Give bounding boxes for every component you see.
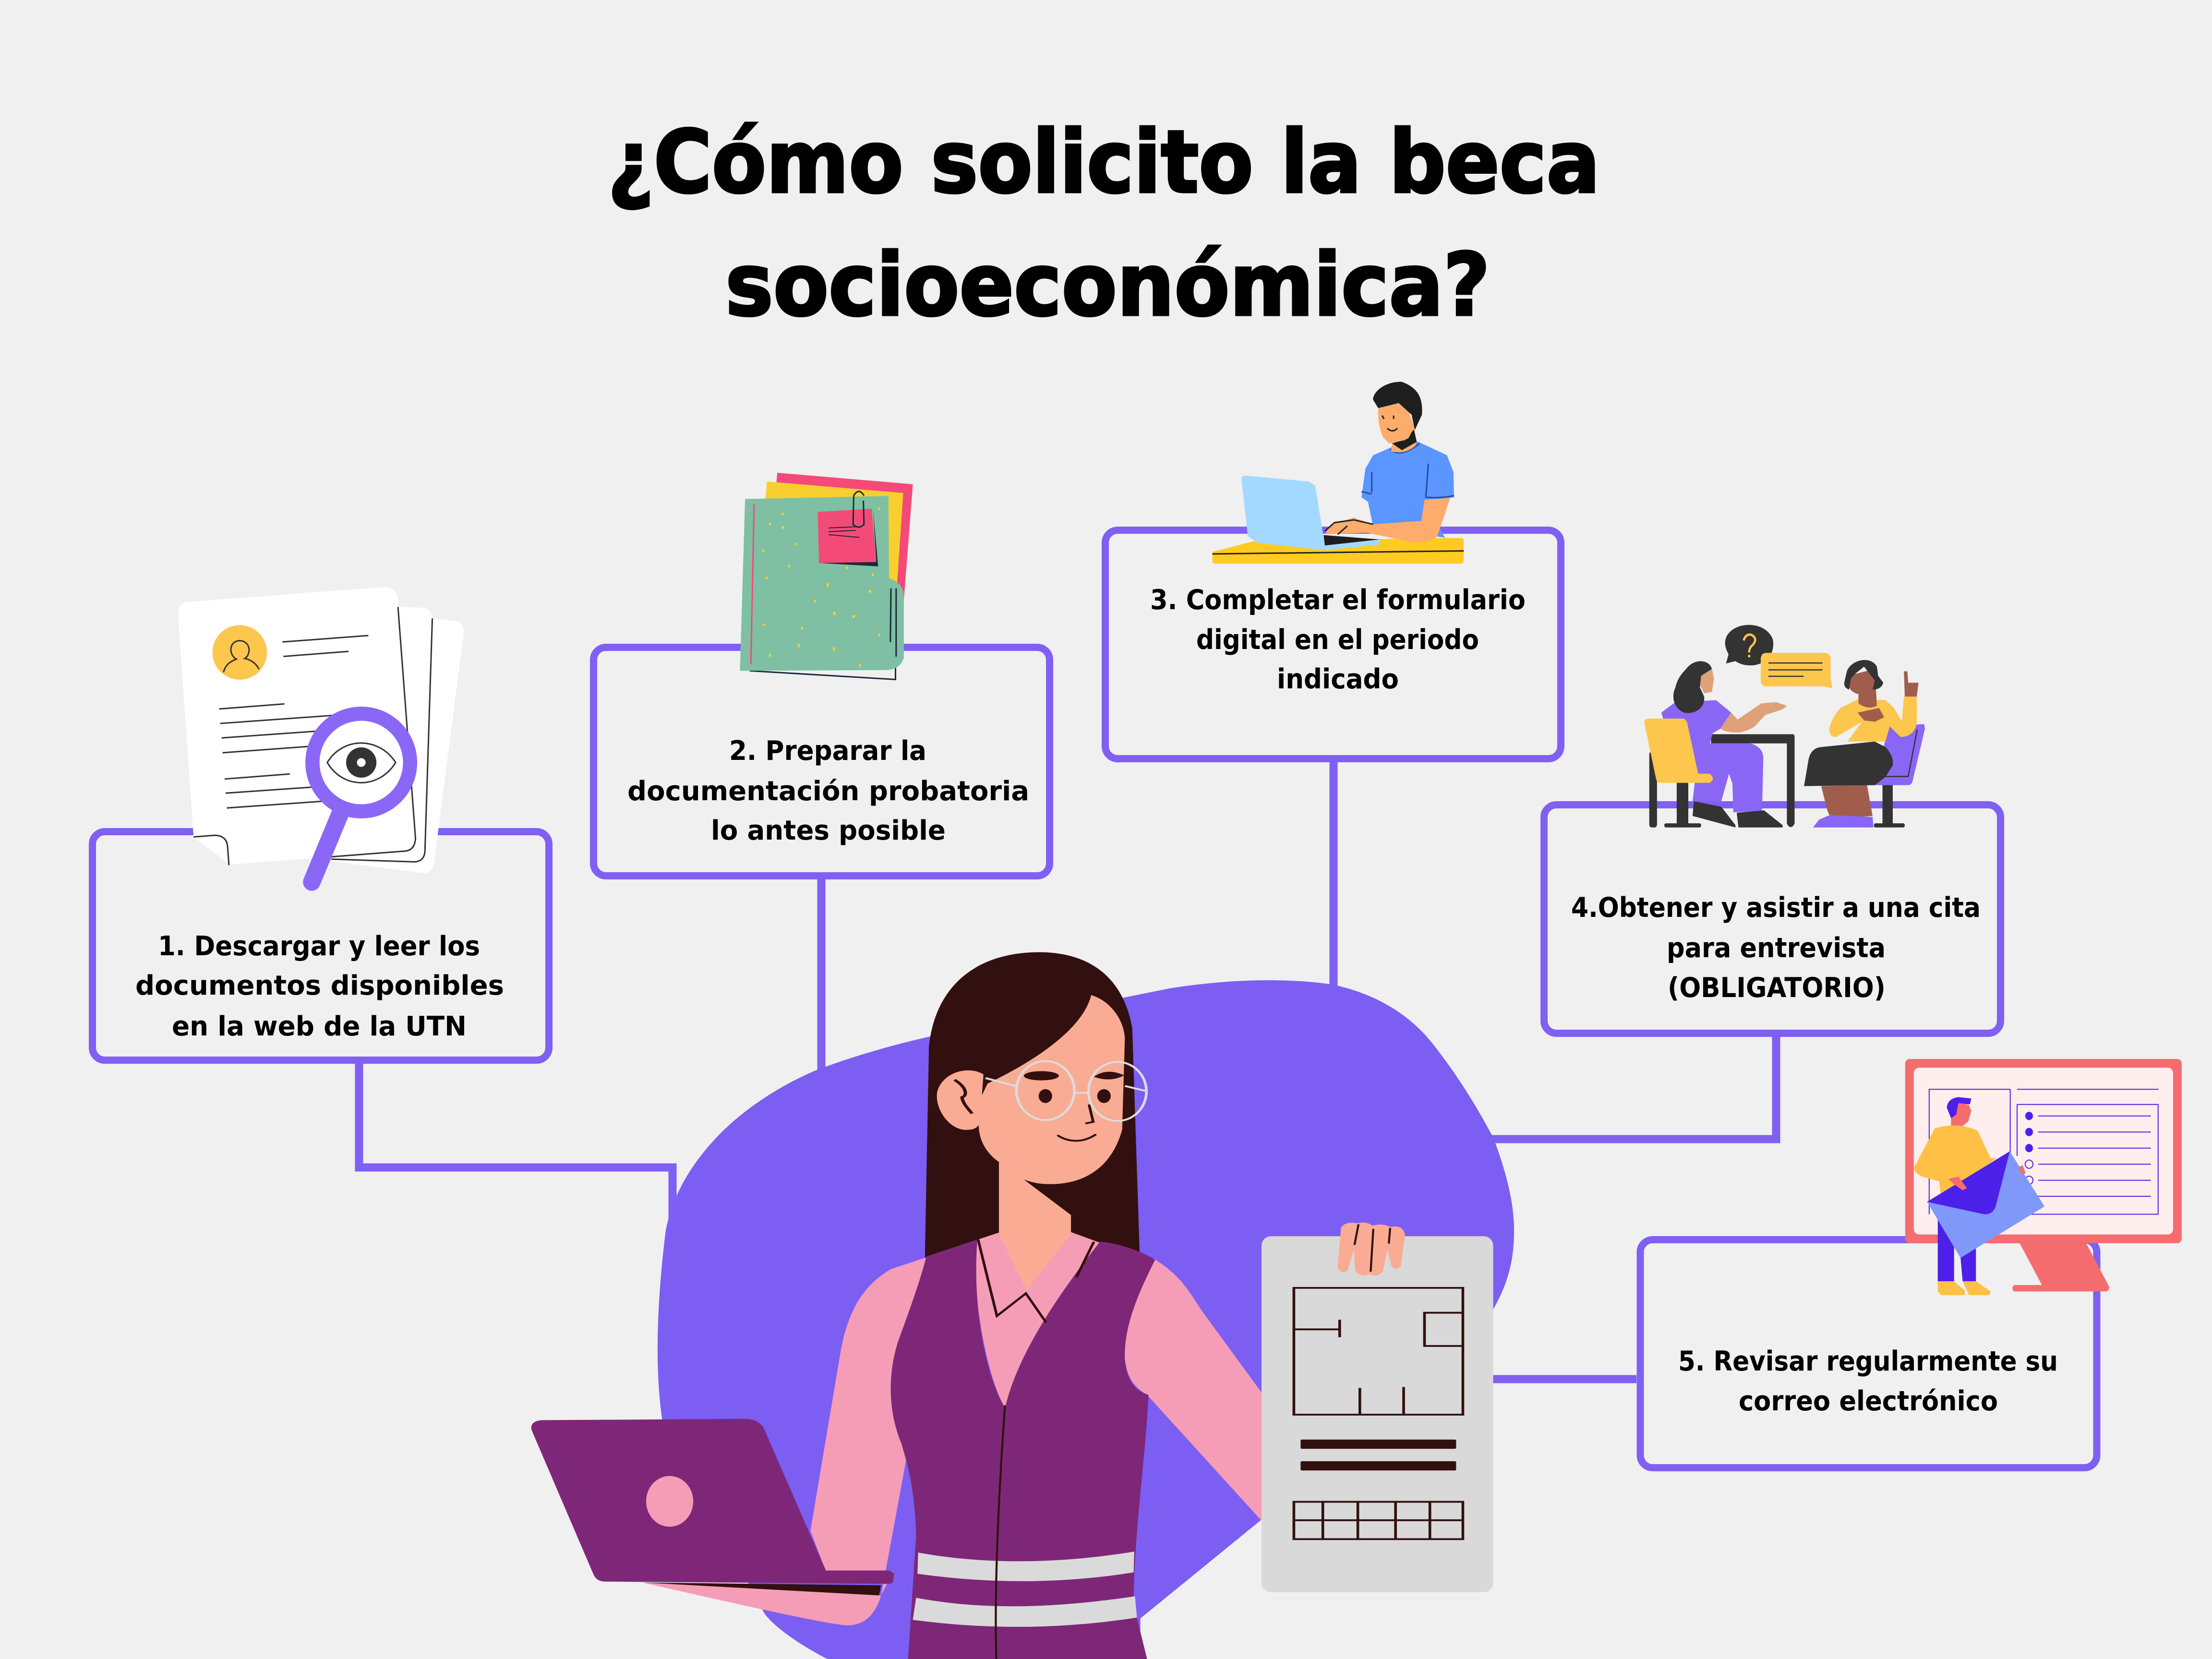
blob background	[658, 980, 1514, 1659]
illustration: woman with laptop and plan	[531, 952, 1493, 1659]
step 4 text: 4.Obtener y asistir a una cita	[1571, 892, 1981, 924]
panel: step 2	[593, 647, 1049, 876]
step 1 text: 1. Descargar y leer los	[158, 931, 480, 962]
step 1 text: documentos disponibles	[135, 970, 504, 1001]
hair	[925, 952, 1140, 1258]
panel: step 5	[1640, 1239, 2097, 1468]
icon: documents with magnifier	[178, 587, 464, 882]
connector lines	[359, 762, 1776, 1379]
title	[608, 112, 1600, 336]
step 3 text: digital en el periodo	[1196, 624, 1479, 656]
step 3 text	[1150, 584, 1526, 695]
panel: step 3	[1105, 530, 1561, 758]
left sleeve	[642, 1257, 926, 1625]
icon: man with laptop	[1213, 382, 1464, 564]
title: socioeconómica?	[725, 235, 1490, 336]
icon: folder with papers	[740, 473, 913, 680]
blouse	[975, 1232, 1100, 1406]
step 4 text: para entrevista	[1667, 932, 1886, 964]
step 2 text: lo antes posible	[711, 815, 946, 846]
icon: interview	[1644, 625, 1925, 828]
face and neck	[979, 995, 1125, 1291]
step 4 text: (OBLIGATORIO)	[1668, 972, 1886, 1004]
panel: step 4	[1544, 805, 2001, 1033]
title: ¿Cómo solicito la beca	[608, 112, 1600, 213]
ear	[937, 1070, 984, 1130]
step 3 text: 3. Completar el formulario	[1150, 584, 1526, 616]
panel: step 1	[92, 831, 549, 1060]
speckles	[762, 507, 880, 667]
document with floor plan	[1262, 1236, 1493, 1592]
glasses	[986, 1061, 1146, 1121]
hand	[1338, 1223, 1405, 1275]
step 5 text	[1678, 1346, 2058, 1417]
step 5 text: 5. Revisar regularmente su	[1678, 1346, 2058, 1377]
step 2 text: documentación probatoria	[627, 776, 1029, 807]
step 5 text: correo electrónico	[1739, 1385, 1998, 1417]
step 1 text: en la web de la UTN	[172, 1011, 467, 1042]
step 1 text	[135, 931, 504, 1042]
laptop	[642, 1583, 881, 1596]
right sleeve	[1125, 1259, 1262, 1521]
step 2 text	[627, 735, 1029, 846]
step 4 text	[1571, 892, 1981, 1004]
icon: monitor and man with envelope	[1905, 1059, 2182, 1295]
vest	[891, 1239, 1155, 1659]
belt stripes	[917, 1551, 1134, 1581]
facial features	[1024, 1071, 1124, 1103]
step 3 text: indicado	[1277, 663, 1399, 695]
step 2 text: 2. Preparar la	[729, 735, 926, 767]
